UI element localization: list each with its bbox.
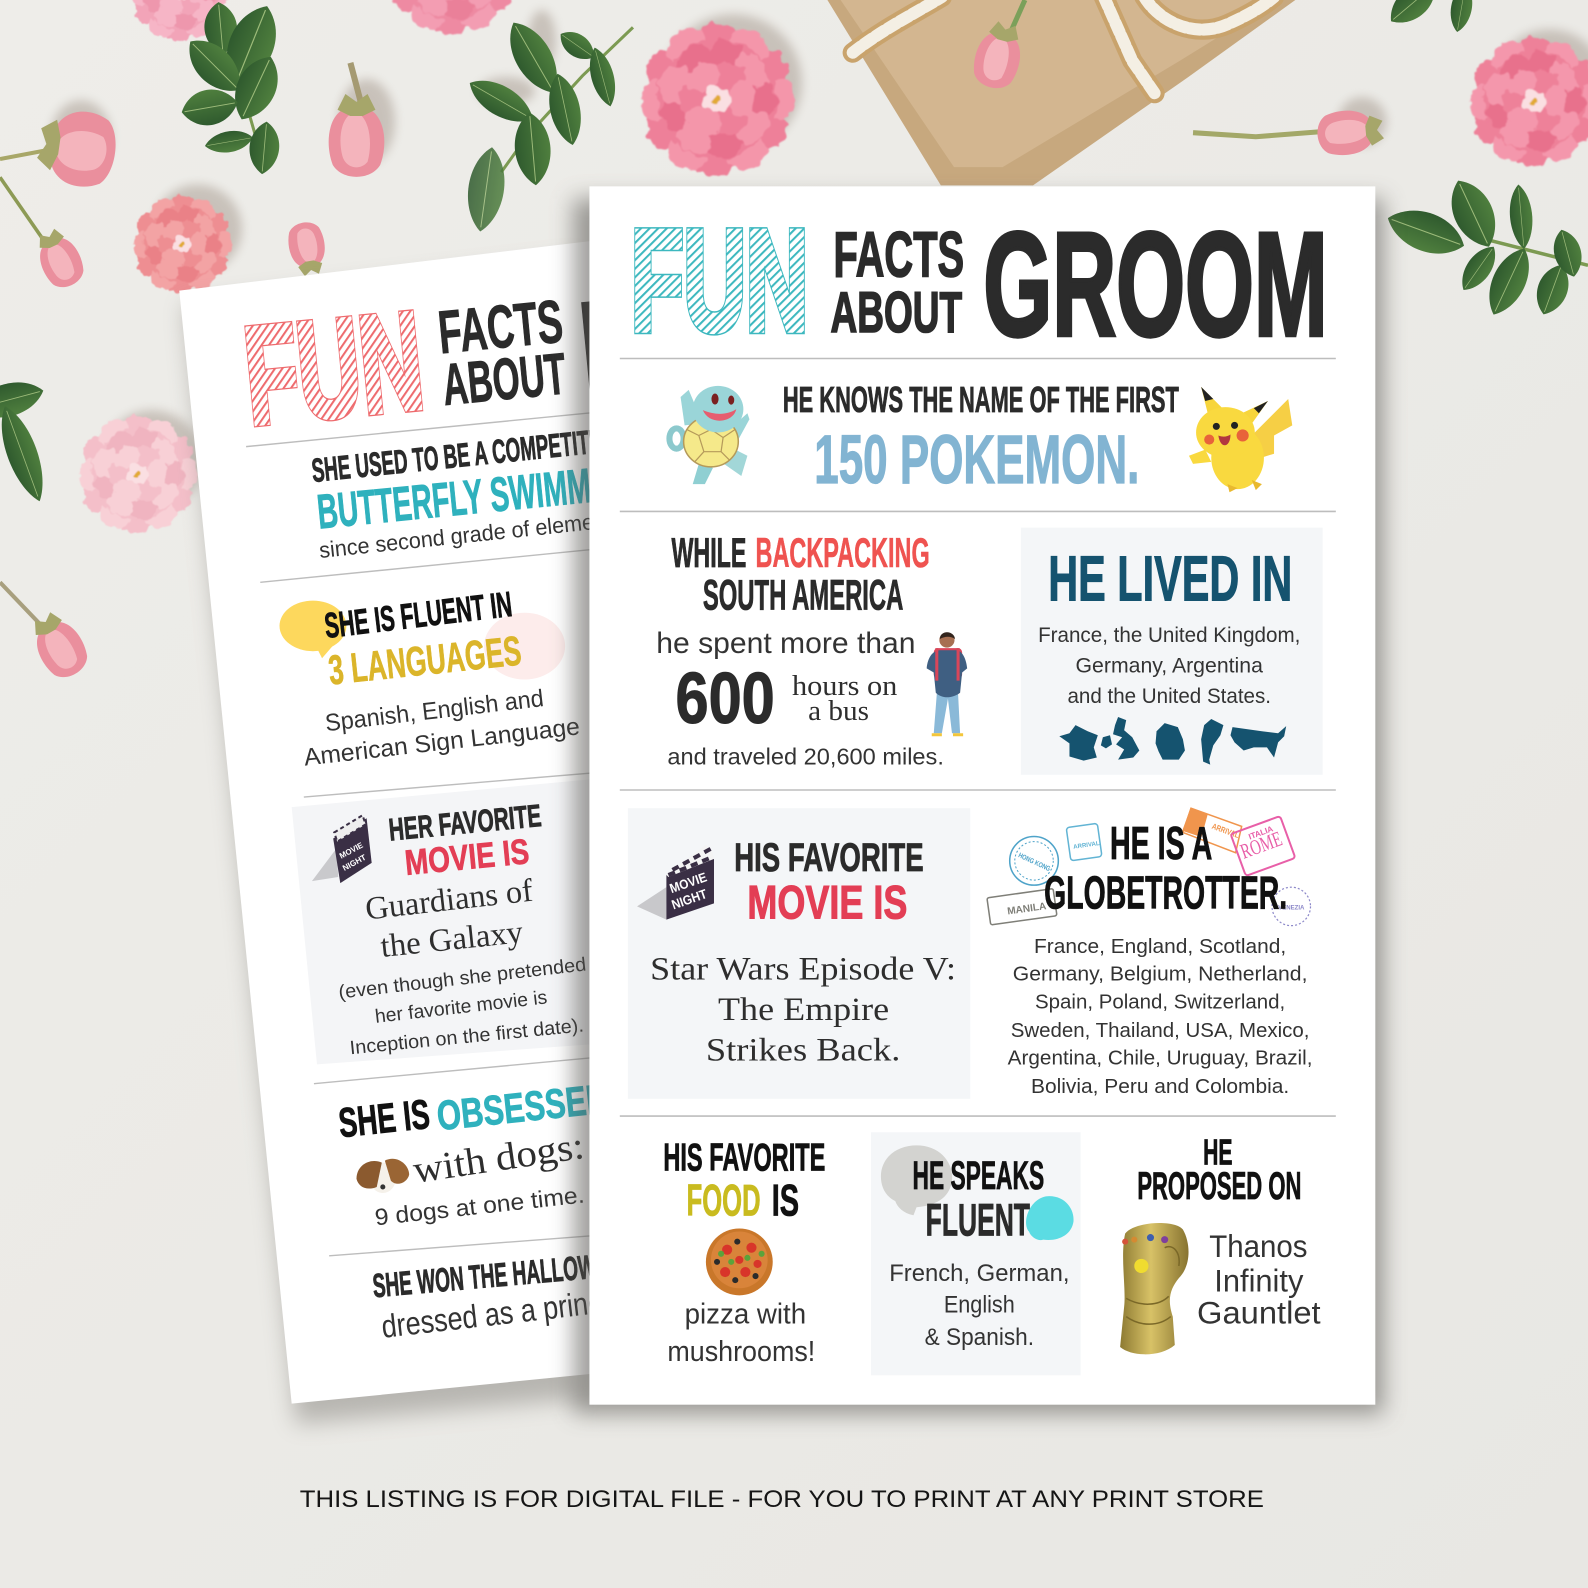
- section: globetrotter: Sweden, Thailand, USA, Mexico,: [1011, 1020, 1309, 1042]
- section: favorite food: pizza with: [685, 1299, 806, 1331]
- kraft paper gift box: [827, 0, 1295, 185]
- icon: clapperboard: MOVIE: [338, 840, 365, 861]
- divider 1: [246, 411, 608, 447]
- small bud: [285, 220, 330, 278]
- icon: dog: [356, 1159, 409, 1193]
- panel: he speaks fluent: [871, 1132, 1081, 1375]
- icon: Pikachu: [1189, 387, 1292, 492]
- title FUN: FUN: [238, 283, 429, 454]
- icon: teal speech bubble: [1026, 1196, 1074, 1240]
- section: he proposed on: Thanos: [1209, 1229, 1307, 1264]
- title BRIDE: BRIDE: [571, 242, 919, 426]
- section: favorite food: mushrooms!: [667, 1336, 815, 1368]
- section: he proposed on: HE: [1203, 1132, 1233, 1173]
- icon: clapperboard: NIGHT: [341, 853, 368, 873]
- rose pale left: [78, 414, 197, 534]
- section: Pokemon fact: [669, 379, 1292, 498]
- icon: clapperboard: MOVIE: [668, 869, 709, 896]
- title FUN: [238, 283, 429, 454]
- main card: Fun Facts About Groom: [589, 186, 1375, 1405]
- leaf branch right: [1381, 173, 1588, 321]
- rose top right: [1469, 36, 1588, 167]
- icon: country maps: [1059, 717, 1286, 765]
- section: backpacking fact: WHILE: [671, 529, 746, 576]
- swimmer fact: BUTTERFLY SWIMMER: [315, 455, 633, 540]
- flowers and leaves decoration: [0, 0, 1588, 685]
- footer note: THIS LISTING IS FOR DIGITAL FILE - FOR YOU TO PRINT AT ANY PRINT STORE: [300, 1486, 1264, 1513]
- card shadow: [184, 259, 581, 1424]
- section: he proposed on: [1120, 1132, 1321, 1354]
- panel: his favorite movie: MOVIE IS: [747, 877, 907, 930]
- section: backpacking fact: [656, 529, 967, 770]
- section: favorite food: HIS FAVORITE: [663, 1137, 825, 1180]
- title FACTS: FACTS: [435, 287, 566, 366]
- dogs fact: [336, 1074, 611, 1230]
- section: backpacking fact: he spent more than: [656, 627, 916, 660]
- panel: he lived in: France, the United Kingdom,: [1038, 623, 1300, 647]
- icon: passport stamps: HONG KONG: [1017, 851, 1052, 873]
- swimmer fact: [310, 421, 644, 563]
- rose large centre: [640, 22, 794, 177]
- leaves left edge: [0, 375, 54, 506]
- icon: clapperboard: [312, 815, 372, 883]
- languages fact: [280, 584, 581, 772]
- section: backpacking fact: BACKPACKING: [756, 529, 930, 576]
- halloween fact: dressed as a princess: [380, 1279, 645, 1345]
- icon: passport stamps: ARRIVAL: [1211, 822, 1240, 840]
- icon: passport stamps: [987, 808, 1311, 926]
- divider 5: [329, 1235, 608, 1256]
- rose bud on the box: [969, 0, 1028, 93]
- panel: her favorite movie: Guardians of: [363, 873, 535, 928]
- rose bud lower left with stem: [0, 177, 90, 293]
- dogs fact: SHE IS: [336, 1090, 432, 1146]
- divider 3: [304, 772, 608, 797]
- languages fact: SHE IS FLUENT IN: [322, 584, 514, 646]
- section: backpacking fact: and traveled 20,600 miles.: [667, 744, 944, 770]
- dogs fact: 9 dogs at one time.: [373, 1181, 586, 1230]
- panel: he speaks fluent: French, German,: [889, 1260, 1069, 1287]
- panel: he speaks fluent: FLUENT: [926, 1195, 1030, 1246]
- panel: her favorite movie: Inception on the first date).: [349, 1015, 585, 1059]
- rose bud left with stem: [0, 106, 120, 191]
- icon: passport stamps: ROME: [1237, 826, 1285, 864]
- panel: his favorite movie: [628, 808, 970, 1099]
- icon: grey speech bubble: [881, 1145, 952, 1215]
- panel: his favorite movie: The Empire: [718, 992, 889, 1028]
- panel: he speaks fluent: & Spanish.: [925, 1324, 1034, 1351]
- swimmer fact: since second grade of elementary: [318, 504, 644, 563]
- halloween fact: SHE WON THE HALLOWEEN: [371, 1246, 637, 1305]
- panel: her favorite movie: the Galaxy: [379, 914, 525, 965]
- section: globetrotter: [987, 808, 1313, 1098]
- section: globetrotter: France, England, Scotland,: [1034, 936, 1286, 958]
- panel: his favorite movie: Star Wars Episode V:: [650, 951, 956, 987]
- section: globetrotter: Bolivia, Peru and Colombia.: [1031, 1076, 1289, 1098]
- section: backpacking fact: 600: [676, 659, 775, 739]
- panel: her favorite movie: [292, 778, 608, 1064]
- title: [631, 201, 1328, 367]
- languages fact: Spanish, English and: [324, 685, 545, 737]
- section: favorite food: FOOD: [687, 1176, 761, 1225]
- panel: her favorite movie: her favorite movie is: [374, 987, 548, 1028]
- icon: Squirtle: [669, 386, 749, 484]
- section: he proposed on: PROPOSED ON: [1137, 1165, 1301, 1208]
- title FUN: FUN: [238, 283, 429, 454]
- panel: he lived in: Germany, Argentina: [1076, 653, 1263, 677]
- section: he proposed on: Infinity: [1214, 1263, 1304, 1298]
- card sheet: [589, 186, 1375, 1405]
- title: FUN: [631, 201, 808, 361]
- icon: passport stamps: ITALIA: [1247, 824, 1275, 841]
- panel: her favorite movie: MOVIE IS: [403, 831, 531, 883]
- title ABOUT: ABOUT: [440, 341, 569, 418]
- halloween fact: [371, 1246, 645, 1345]
- dogs fact: OBSESSED: [435, 1074, 611, 1139]
- back card: Fun Facts About Bride: [179, 239, 919, 1424]
- section: backpacking fact: SOUTH AMERICA: [703, 572, 903, 620]
- panel: he speaks fluent: English: [944, 1292, 1015, 1319]
- divider 4: [314, 1056, 608, 1084]
- icon: clapperboard: NIGHT: [670, 886, 709, 912]
- leaf branch 1: [178, 0, 288, 175]
- icon: infinity gauntlet: [1120, 1223, 1189, 1354]
- section: he proposed on: Gauntlet: [1197, 1296, 1321, 1331]
- icon: passport stamps: MANILA: [1007, 901, 1048, 917]
- rose bud lower side: [0, 582, 95, 685]
- icon: pizza: [706, 1228, 773, 1295]
- section: backpacking fact: a bus: [808, 696, 869, 727]
- section: globetrotter: GLOBETROTTER.: [1044, 866, 1287, 918]
- section: favorite food: [663, 1137, 825, 1368]
- section: Pokemon fact: HE KNOWS THE NAME OF THE FIRST: [783, 379, 1179, 420]
- title: FUN: [631, 201, 808, 361]
- leaves top right: [1382, 0, 1476, 34]
- rose salmon left: [133, 194, 232, 294]
- rose top left: [131, 0, 230, 42]
- rose bud right with stem: [1193, 107, 1385, 157]
- panel: her favorite movie: HER FAVORITE: [387, 798, 543, 848]
- panel: he lived in: and the United States.: [1067, 684, 1271, 708]
- icon: backpacker: [927, 632, 967, 736]
- section: globetrotter: Spain, Poland, Switzerland,: [1035, 992, 1285, 1014]
- section: favorite food: IS: [772, 1176, 799, 1225]
- divider 2: [260, 548, 608, 582]
- section: globetrotter: HE IS A: [1110, 817, 1212, 869]
- dogs fact: with dogs:: [410, 1125, 587, 1192]
- swimmer fact: SHE USED TO BE A COMPETITIVE: [310, 421, 621, 490]
- icon: passport stamps: VENEZIA: [1278, 905, 1305, 911]
- title: FACTS: [833, 218, 964, 290]
- section: globetrotter: Argentina, Chile, Uruguay, Brazil,: [1008, 1047, 1313, 1069]
- icon: passport stamps: ARRIVAL: [1073, 841, 1100, 851]
- twine: [853, 0, 1274, 93]
- soft flower shadows: [51, 10, 1588, 511]
- divider: [620, 359, 1336, 1116]
- panel: he speaks fluent: HE SPEAKS: [912, 1154, 1044, 1198]
- languages fact: 3 LANGUAGES: [326, 627, 523, 694]
- title: GROOM: [983, 202, 1328, 367]
- languages fact: American Sign Language: [302, 713, 581, 772]
- rose top centre: [387, 0, 518, 35]
- panel: his favorite movie: Strikes Back.: [706, 1032, 900, 1068]
- section: Pokemon fact: 150 POKEMON.: [814, 421, 1139, 498]
- panel: he lived in: HE LIVED IN: [1048, 543, 1292, 615]
- icon: clapperboard: [637, 845, 714, 920]
- rose bud centre: [329, 63, 384, 177]
- main card shadow: [573, 198, 1383, 1414]
- section: globetrotter: Germany, Belgium, Netherland,: [1013, 963, 1307, 985]
- panel: he lived in: [1021, 528, 1323, 775]
- leaf branch 2: [462, 14, 633, 234]
- card sheet: [179, 239, 608, 1404]
- section: backpacking fact: hours on: [792, 671, 897, 702]
- title: ABOUT: [830, 281, 962, 345]
- panel: his favorite movie: HIS FAVORITE: [734, 836, 924, 880]
- panel: her favorite movie: (even though she pretended: [337, 954, 587, 1004]
